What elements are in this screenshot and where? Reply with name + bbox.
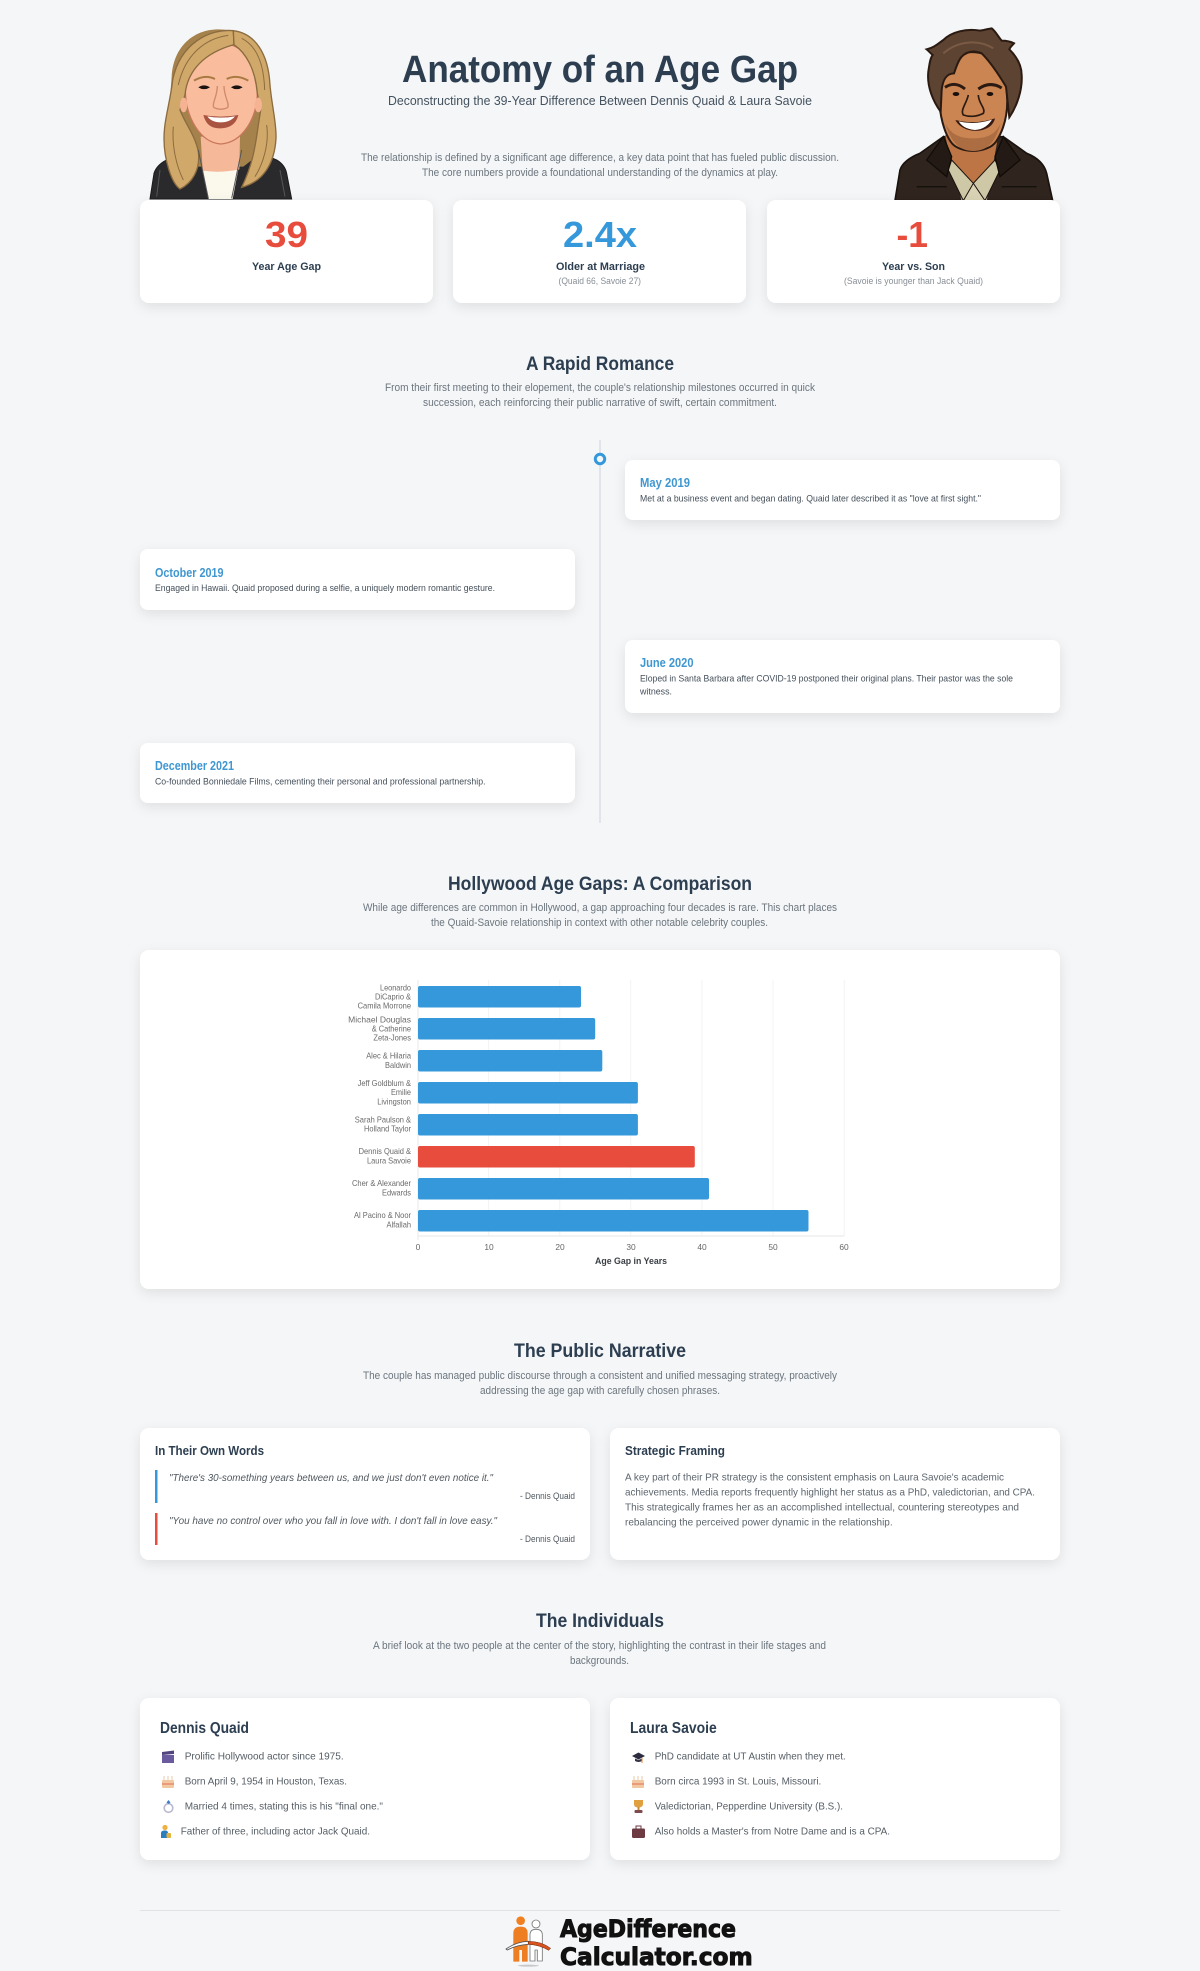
panel: Dennis Quaid facts: Prolific Hollywood actor since 1975. — [185, 1752, 344, 1762]
footer divider — [140, 1910, 1060, 1911]
panel: Laura Savoie facts: Laura Savoie — [630, 1720, 717, 1737]
quote one — [155, 1470, 575, 1503]
timeline card: June 2020: June 2020 — [640, 656, 694, 670]
panel: Laura Savoie facts: PhD candidate at UT Austin when they met. — [655, 1752, 846, 1762]
icon: trophy — [634, 1800, 643, 1813]
bar chart: age gaps: Baldwin — [385, 1060, 411, 1070]
intro paragraph — [361, 152, 839, 179]
bar chart: age gaps: Al Pacino & Noor — [354, 1210, 411, 1220]
icon: clapperboard — [162, 1750, 174, 1763]
timeline card: October 2019: October 2019 — [155, 566, 224, 580]
bar chart: age gaps: 0 — [416, 1242, 421, 1252]
panel: Strategic Framing: A key part of their PR strategy is the consistent emphasis on Laura Savoie's academic — [625, 1472, 1004, 1484]
stat card: 2.4x older at marriage — [453, 200, 746, 303]
bar chart: age gaps: Edwards — [382, 1187, 411, 1197]
icon: ring — [164, 1800, 173, 1812]
stat card: 2.4x older at marriage: 2.4x — [563, 214, 637, 255]
bar chart: age gaps: 60 — [839, 1242, 849, 1252]
text: timeline intro: succession, each reinforcing their public narrative of swift, certain commitment. — [423, 397, 777, 409]
bar chart: age gaps: Camila Morrone — [358, 1000, 411, 1010]
timeline card: May 2019: Met at a business event and began dating. Quaid later described it as "love at first sight." — [640, 492, 981, 504]
title: Anatomy of an Age Gap — [402, 48, 798, 91]
timeline card: May 2019: May 2019 — [640, 476, 690, 490]
panel: Strategic Framing: rebalancing the perceived power dynamic in the relationship. — [625, 1518, 893, 1528]
quote two — [155, 1513, 575, 1545]
bar chart: age gaps — [348, 980, 849, 1266]
text: individuals intro: A brief look at the two people at the center of the story, highlighting the contrast in their life stages and — [373, 1640, 826, 1652]
bar chart: age gaps: Emilie — [391, 1087, 411, 1097]
stat card: -1 year vs son: (Savoie is younger than Jack Quaid) — [844, 276, 983, 286]
portrait: Dennis Quaid cartoon — [895, 28, 1053, 201]
quote one: - Dennis Quaid — [520, 1491, 575, 1501]
panel: Strategic Framing: This strategically frames her as an accomplished intellectual, countering stereotypes and — [625, 1502, 1019, 1514]
timeline card: June 2020: witness. — [639, 686, 672, 696]
bar chart: age gaps: Sarah Paulson & — [355, 1114, 411, 1124]
stat card: -1 year vs son: Year vs. Son — [882, 261, 945, 273]
text: site logo wordmark: AgeDifference — [560, 1915, 736, 1943]
panel: Dennis Quaid facts: Father of three, including actor Jack Quaid. — [181, 1826, 370, 1838]
text: narrative intro: addressing the age gap with carefully chosen phrases. — [480, 1385, 720, 1397]
icon: father and child — [161, 1825, 171, 1838]
timeline marker dot — [595, 454, 605, 464]
bar chart: age gaps: 20 — [555, 1242, 565, 1252]
intro paragraph: The relationship is defined by a significant age difference, a key data point that has fueled public discussion. — [361, 152, 839, 164]
bar chart: age gaps: Age Gap in Years — [595, 1256, 667, 1266]
bar chart: age gaps: Michael Douglas — [348, 1014, 411, 1024]
text: chart intro — [363, 902, 837, 929]
stat card: 2.4x older at marriage: (Quaid 66, Savoie 27) — [558, 276, 641, 286]
portrait: Laura Savoie cartoon — [150, 29, 292, 199]
text: chart intro: While age differences are common in Hollywood, a gap approaching four decades is rare. This chart places — [363, 902, 837, 914]
stat card: 39 year age gap: Year Age Gap — [252, 261, 321, 273]
timeline axis line — [599, 440, 601, 823]
heading: Hollywood Age Gaps: Hollywood Age Gaps: A Comparison — [448, 873, 752, 895]
bar chart: age gaps: & Catherine — [372, 1023, 411, 1033]
text: timeline intro — [385, 382, 816, 409]
panel: In Their Own Words: In Their Own Words — [155, 1443, 264, 1458]
bar chart: age gaps: 50 — [768, 1242, 778, 1252]
text: chart intro: the Quaid-Savoie relationship in context with other notable celebrity couples. — [431, 917, 768, 929]
stat card: 2.4x older at marriage: Older at Marriage — [556, 261, 645, 273]
text: timeline intro: From their first meeting to their elopement, the couple's relationship milestones occurred in quick — [385, 382, 816, 394]
bar chart: age gaps: Holland Taylor — [364, 1124, 411, 1134]
panel: Dennis Quaid facts: Dennis Quaid — [160, 1720, 249, 1737]
quote two: "You have no control over who you fall in love with. I don't fall in love easy." — [169, 1516, 498, 1527]
stat card: -1 year vs son: -1 — [896, 214, 928, 255]
bar chart: age gaps: Alec & Hilaria — [366, 1051, 411, 1061]
bar chart: age gaps: 40 — [697, 1242, 707, 1252]
text: individuals intro: backgrounds. — [570, 1655, 629, 1667]
stat card: 39 year age gap — [140, 200, 433, 303]
panel: Laura Savoie facts — [610, 1698, 1060, 1860]
panel: Laura Savoie facts: Born circa 1993 in St. Louis, Missouri. — [655, 1776, 821, 1788]
panel: Strategic Framing: achievements. Media reports frequently highlight her status as a PhD, valedictorian, and CPA. — [625, 1488, 1035, 1498]
icon: briefcase — [632, 1826, 645, 1838]
icon: graduation cap — [632, 1752, 645, 1763]
bar chart: age gaps: Zeta-Jones — [373, 1032, 411, 1042]
panel: In Their Own Words — [140, 1428, 590, 1560]
text: narrative intro — [363, 1370, 838, 1397]
icon: birthday cake — [162, 1776, 174, 1788]
bar chart: age gaps: 10 — [484, 1242, 494, 1252]
text: site logo wordmark: Calculator.com — [560, 1943, 753, 1971]
text: narrative intro: The couple has managed public discourse through a consistent and unified messaging strategy, proactively — [363, 1370, 838, 1382]
panel: Dennis Quaid facts — [140, 1698, 590, 1860]
stat card: 39 year age gap: 39 — [265, 214, 308, 255]
panel: Strategic Framing — [610, 1428, 1060, 1560]
bar chart: age gaps: Livingston — [377, 1096, 411, 1106]
panel: bar chart card — [140, 950, 1060, 1289]
stat card: -1 year vs son — [767, 200, 1060, 303]
timeline card: December 2021: December 2021 — [155, 759, 234, 773]
panel: Laura Savoie facts: Valedictorian, Pepperdine University (B.S.). — [655, 1802, 843, 1812]
heading: The Individuals: The Individuals — [536, 1610, 664, 1632]
subtitle: Deconstructing the 39-Year Difference Between Dennis Quaid & Laura Savoie — [388, 93, 812, 108]
timeline card: October 2019 — [140, 549, 575, 610]
timeline card: December 2021: Co-founded Bonniedale Films, cementing their personal and professional partnership. — [155, 776, 486, 786]
text: individuals intro — [373, 1640, 826, 1667]
timeline card: May 2019 — [625, 460, 1060, 520]
panel: Laura Savoie facts: Also holds a Master's from Notre Dame and is a CPA. — [655, 1826, 890, 1838]
icon: site logo — [506, 1916, 551, 1967]
bar chart: age gaps: Laura Savoie — [367, 1155, 411, 1165]
bar chart: age gaps: Leonardo — [380, 982, 411, 992]
icon: birthday cake — [632, 1776, 644, 1788]
bar chart: age gaps: Cher & Alexander — [352, 1178, 411, 1188]
bar chart: age gaps: DiCaprio & — [375, 991, 411, 1001]
bar chart: age gaps: 30 — [626, 1242, 636, 1252]
quote one: "There's 30-something years between us, and we just don't even notice it." — [169, 1473, 494, 1484]
heading: The Public Narrative: The Public Narrative — [514, 1340, 686, 1362]
bar chart: age gaps: Dennis Quaid & — [359, 1146, 411, 1156]
panel: Dennis Quaid facts: Married 4 times, stating this is his "final one." — [185, 1802, 383, 1812]
panel: Dennis Quaid facts: Born April 9, 1954 in Houston, Texas. — [185, 1776, 347, 1788]
bar chart: age gaps: Alfallah — [386, 1219, 411, 1229]
panel: Strategic Framing: Strategic Framing — [625, 1443, 725, 1458]
intro paragraph: The core numbers provide a foundational understanding of the dynamics at play. — [422, 167, 778, 179]
timeline card: June 2020 — [625, 640, 1060, 713]
timeline card: June 2020: Eloped in Santa Barbara after COVID-19 postponed their original plans. Their pastor was the sole — [640, 672, 1013, 684]
text: site logo wordmark — [560, 1915, 753, 1971]
bar chart: age gaps: Jeff Goldblum & — [358, 1078, 411, 1088]
timeline card: December 2021 — [140, 743, 575, 803]
heading: A Rapid Romance: A Rapid Romance — [526, 353, 674, 375]
timeline card: October 2019: Engaged in Hawaii. Quaid proposed during a selfie, a uniquely modern romantic gesture. — [155, 582, 495, 593]
quote two: - Dennis Quaid — [520, 1534, 575, 1544]
